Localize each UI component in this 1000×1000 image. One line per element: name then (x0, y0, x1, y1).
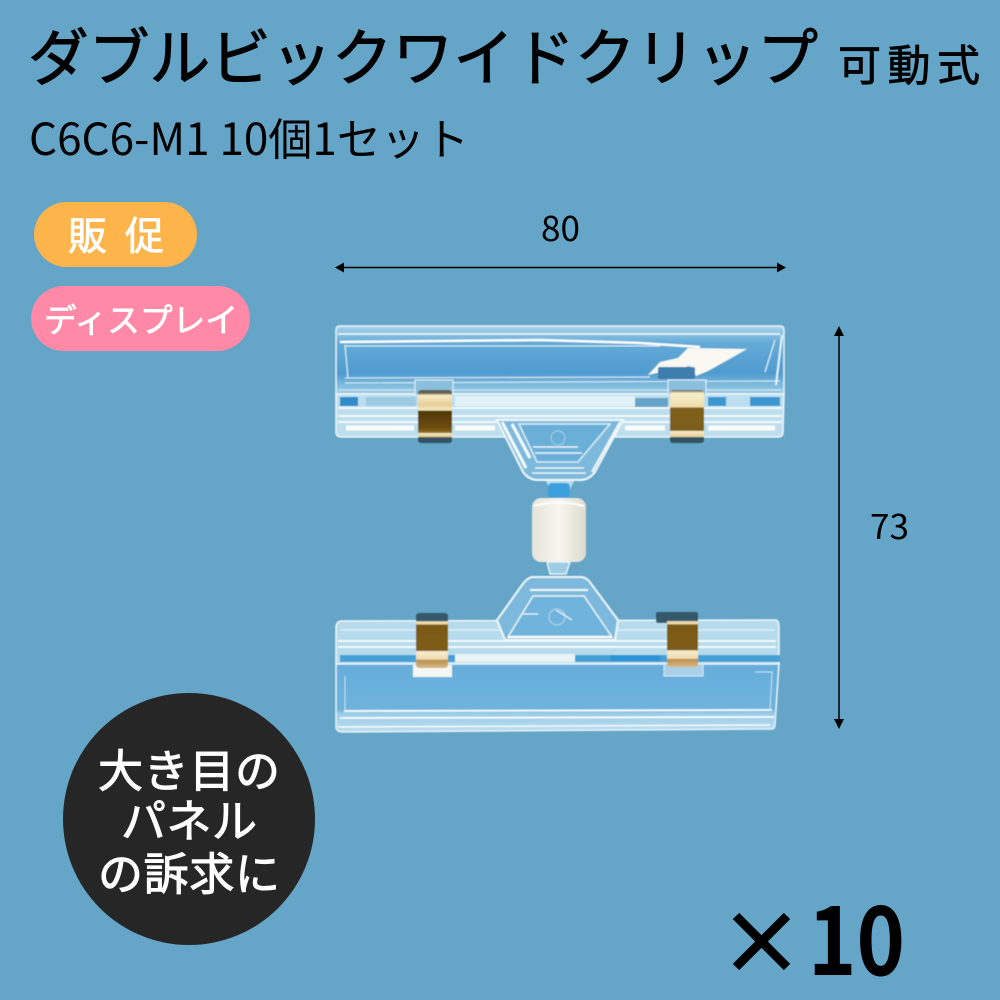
black circle callout: の訴求に (98, 838, 280, 903)
height dimension: 73 (834, 326, 909, 729)
upper left metal clip (418, 390, 452, 443)
tag: display (31, 286, 250, 351)
black circle callout: 大き目の (98, 735, 280, 800)
lower clip (336, 562, 780, 732)
lower right metal clip (656, 612, 698, 667)
quantity: times ten: 10 (808, 867, 905, 1000)
upper right metal clip (670, 390, 704, 443)
lower clip panel (336, 664, 779, 732)
upper clip panel (336, 326, 784, 394)
black circle callout: パネル (121, 785, 257, 850)
tag: sales promotion (34, 202, 197, 267)
glare and notch (648, 348, 747, 379)
tag: sales promotion: 販促 (68, 206, 164, 262)
upper clip (336, 326, 784, 498)
quantity: times ten (736, 867, 905, 1000)
tag: display: ディスプレイ (44, 294, 238, 342)
upper clip neck (497, 420, 623, 498)
title suffix: movable type: 可動式 (838, 32, 980, 94)
width dimension: 80: 80 (541, 202, 580, 251)
product photo: double clip (336, 326, 784, 732)
lower clip neck (497, 562, 618, 640)
lower left metal clip (416, 613, 448, 668)
swivel joint (532, 498, 586, 562)
width dimension: 80 (335, 202, 786, 272)
upper clip rail (336, 394, 784, 437)
model number and pack size: C6C6-M1 10個1セット (29, 104, 469, 168)
height dimension: 73: 73 (870, 500, 909, 549)
black circle callout (63, 693, 315, 945)
lower clip rail (336, 620, 779, 664)
title: ダブルビックワイドクリップ (28, 8, 818, 98)
